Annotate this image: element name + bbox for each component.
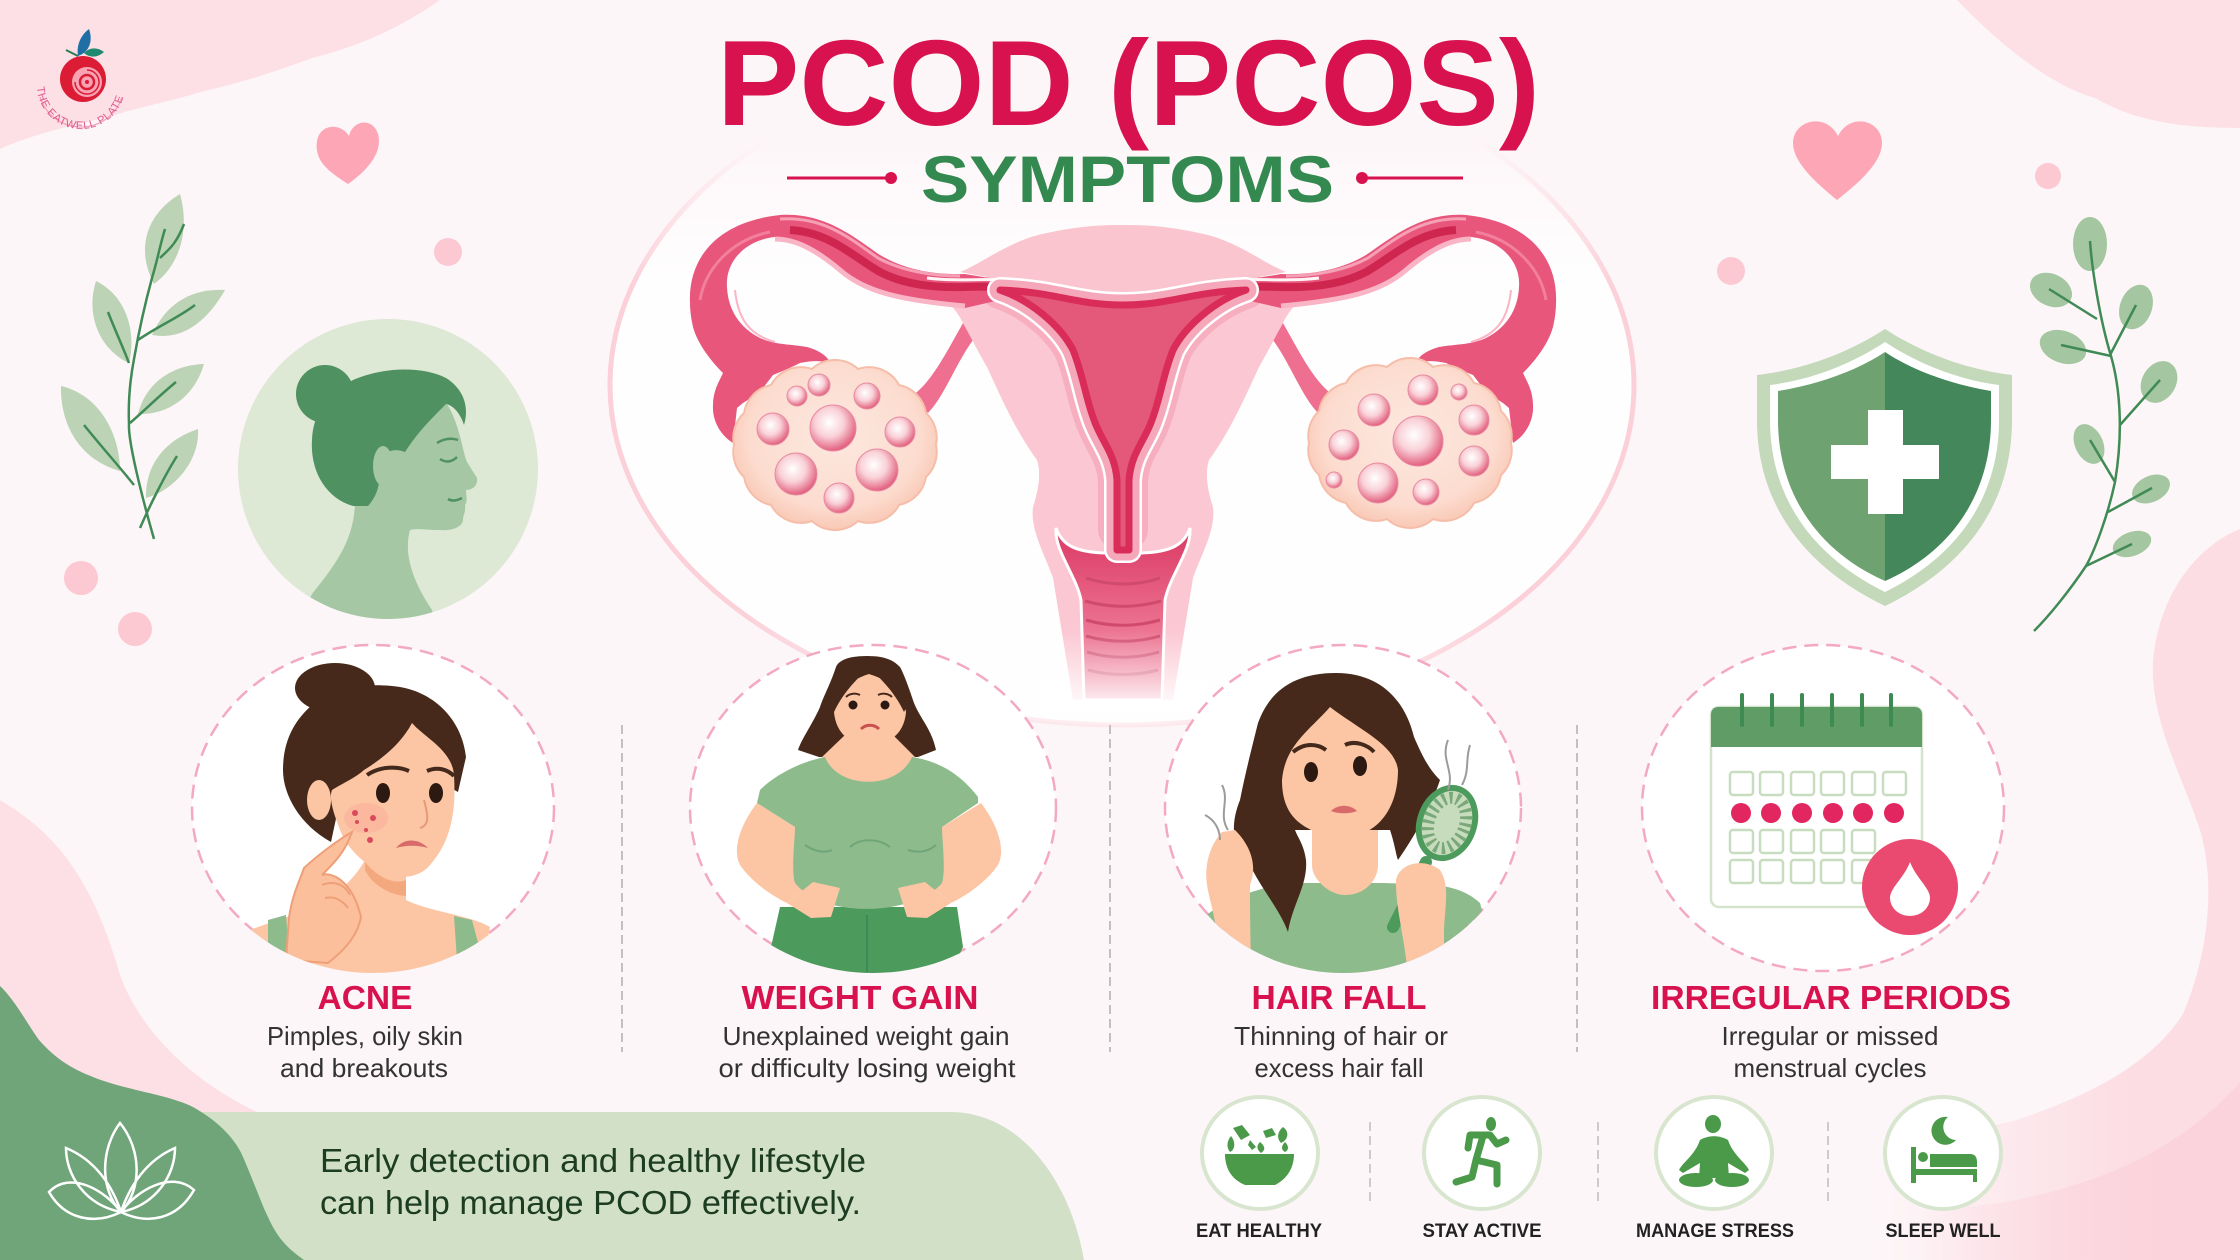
- icon: salad bowl: [1225, 1125, 1294, 1185]
- icon: shield with cross: [1757, 329, 2012, 606]
- icon: lotus: [49, 1123, 194, 1219]
- green corner blob: [0, 986, 304, 1260]
- label: hair fall: Thinning of hair or: [1234, 1021, 1448, 1051]
- banner: early detection message: [190, 1112, 1084, 1260]
- decorative blob: bottom right corner: [1900, 1082, 2240, 1260]
- tip: stay active: [1422, 1097, 1542, 1242]
- label: hair fall: [1234, 979, 1448, 1083]
- icon: blood drop badge: [1862, 839, 1958, 935]
- icon: runner: [1456, 1117, 1506, 1184]
- banner: early detection message: Early detection and healthy lifestyle: [320, 1142, 866, 1179]
- subtitle: symptoms: SYMPTOMS: [921, 142, 1334, 216]
- right ovary: [1308, 358, 1512, 528]
- cervix and vagina: [1056, 528, 1190, 700]
- decorative blob: top left: [0, 0, 440, 149]
- logo: The Eatwell Plate: [37, 29, 124, 130]
- label: irregular periods: Irregular or missed: [1722, 1021, 1938, 1051]
- illustration: woman with hair fall: [1204, 673, 1495, 985]
- label: weight gain: WEIGHT GAIN: [742, 979, 978, 1016]
- tip: sleep well: SLEEP WELL: [1886, 1221, 2001, 1242]
- icon: meditation: [1679, 1115, 1749, 1187]
- label: irregular periods: IRREGULAR PERIODS: [1651, 979, 2011, 1016]
- ovarian ligaments: [910, 323, 1336, 413]
- label: weight gain: [718, 979, 1016, 1083]
- label: irregular periods: menstrual cycles: [1734, 1053, 1926, 1083]
- tip: manage stress: [1636, 1097, 1794, 1242]
- tip dividers: [1370, 1122, 1828, 1203]
- card: acne: [192, 645, 554, 980]
- icon: right leaf branch: [2024, 217, 2185, 631]
- title: PCOD (PCOS): [717, 15, 1540, 151]
- banner: early detection message: can help manage PCOD effectively.: [320, 1184, 861, 1221]
- tube highlight and dark band: [790, 230, 1456, 303]
- label: acne: [267, 979, 463, 1083]
- illustration: woman with weight gain: [737, 656, 1001, 985]
- decorative dots: [64, 163, 2061, 646]
- uterus background circle: [610, 45, 1634, 725]
- card: irregular periods: [1642, 645, 2004, 971]
- label: weight gain: Unexplained weight gain: [722, 1021, 1010, 1051]
- tip: eat healthy: EAT HEALTHY: [1196, 1221, 1322, 1242]
- illustration: calendar: [1711, 695, 1958, 935]
- label: acne: Pimples, oily skin: [267, 1021, 463, 1051]
- fundus dome: [960, 225, 1286, 298]
- tip: sleep well: [1885, 1097, 2001, 1242]
- subtitle: symptoms: [787, 142, 1463, 216]
- vaginal rings: [1085, 578, 1161, 674]
- uterus body: [940, 290, 1306, 700]
- label: hair fall: HAIR FALL: [1252, 979, 1426, 1016]
- card: hair fall: [1165, 645, 1521, 985]
- tip: stay active: STAY ACTIVE: [1422, 1221, 1542, 1242]
- left ovary: [733, 360, 937, 530]
- heart: upper right: [1793, 121, 1882, 200]
- card dividers: [622, 725, 1577, 1052]
- icon: left leaf branch: [61, 194, 225, 539]
- decorative blob: right side: [1800, 529, 2240, 1260]
- heart: upper left: [317, 122, 379, 184]
- label: irregular periods: [1651, 979, 2011, 1083]
- fade at base: [1040, 630, 1206, 712]
- label: weight gain: or difficulty losing weight: [718, 1053, 1016, 1083]
- illustration: woman with acne: [244, 663, 490, 980]
- label: hair fall: excess hair fall: [1254, 1053, 1424, 1083]
- tip: eat healthy: [1196, 1097, 1322, 1242]
- tip: manage stress: MANAGE STRESS: [1636, 1221, 1794, 1242]
- label: acne: ACNE: [318, 979, 412, 1016]
- cavity shading: [1000, 290, 1246, 530]
- fallopian tubes: [690, 215, 1556, 443]
- card: weight gain: [690, 645, 1056, 985]
- decorative blob: bottom left pink: [0, 800, 260, 1260]
- uterine cavity: [1000, 290, 1246, 550]
- logo: The Eatwell Plate: THE EATWELL PLATE: [37, 86, 124, 130]
- decorative blob: top right: [1957, 0, 2240, 128]
- label: acne: and breakouts: [280, 1053, 448, 1083]
- icon: bed and moon: [1911, 1117, 1977, 1183]
- uterus illustration: [690, 215, 1556, 712]
- icon: woman profile circle: [238, 319, 538, 640]
